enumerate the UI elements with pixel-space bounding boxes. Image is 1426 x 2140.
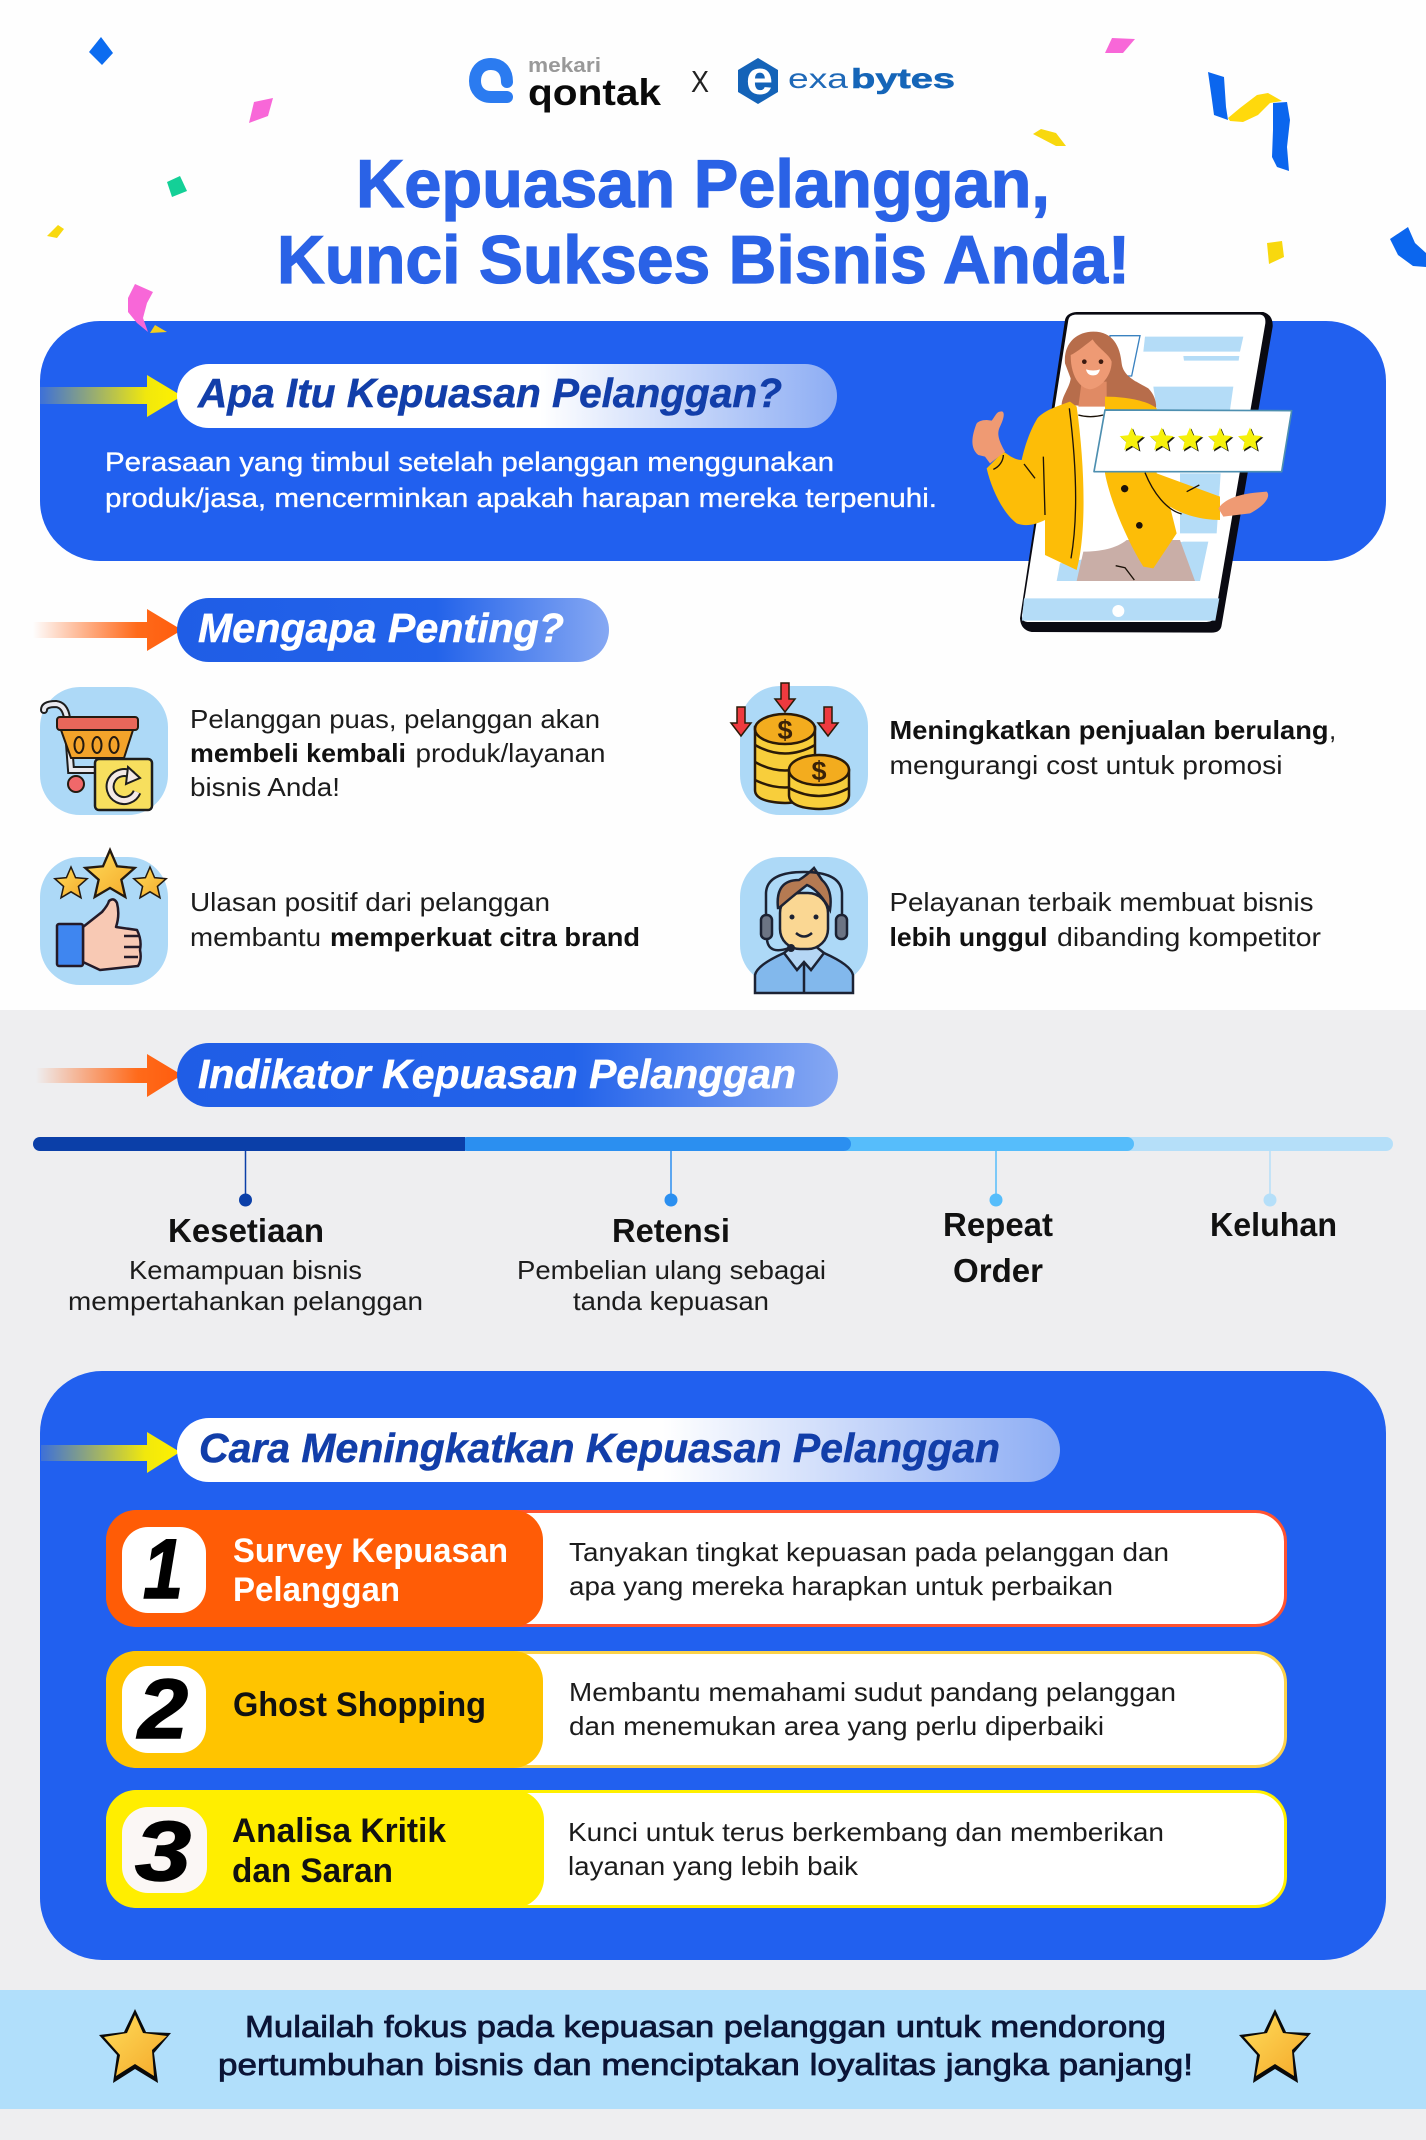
heading pill: indikator: Indikator Kepuasan Pelanggan xyxy=(198,1051,796,1097)
text block: membeli kembali xyxy=(190,738,406,768)
heading pill: mengapa penting xyxy=(177,598,609,662)
step 2 xyxy=(106,1651,1286,1768)
text block: Ulasan positif dari pelanggan xyxy=(190,887,550,917)
panel: benefit sales xyxy=(731,683,1336,815)
indicator: kesetiaan: Kesetiaan xyxy=(168,1212,324,1249)
text block: lebih unggul xyxy=(890,922,1048,952)
bytes wordmark: bytes xyxy=(851,63,955,94)
step 2: 2 xyxy=(136,1662,188,1756)
confetti decoration xyxy=(47,37,1426,267)
heading pill: Apa Itu Kepuasan Pelanggan? xyxy=(197,370,782,416)
text block xyxy=(890,715,1336,780)
rating card xyxy=(1094,410,1292,472)
icon: shopping cart xyxy=(40,687,168,815)
text block: membantu xyxy=(190,922,321,952)
mekari wordmark: mekari xyxy=(528,55,601,77)
icon: stars and thumbs up xyxy=(40,850,168,985)
indicator: kesetiaan xyxy=(68,1151,423,1316)
icon: left star xyxy=(99,2009,171,2083)
step 3: dan Saran xyxy=(232,1852,393,1890)
text block: mengurangi cost untuk promosi xyxy=(890,750,1282,780)
step 1: Survey Kepuasan xyxy=(233,1532,508,1570)
panel: cara meningkatkan kepuasan xyxy=(40,1371,1386,1960)
step 3: Analisa Kritik xyxy=(232,1812,446,1850)
arrow: orange indikator xyxy=(36,1054,182,1097)
step 1 xyxy=(106,1510,1286,1627)
woman xyxy=(972,332,1268,581)
definition text: produk/jasa, mencerminkan apakah harapan mereka terpenuhi. xyxy=(105,483,937,513)
text block xyxy=(190,704,606,802)
indicator: retensi: Retensi xyxy=(612,1212,730,1249)
icon: right star xyxy=(1239,2009,1311,2083)
icon: exabytes hexagon xyxy=(738,58,778,104)
step 3 xyxy=(106,1790,1286,1908)
text block: Meningkatkan penjualan berulang xyxy=(890,715,1328,745)
background: gray lower area xyxy=(0,1010,1426,2140)
step 2: Ghost Shopping xyxy=(233,1686,486,1724)
closing text xyxy=(218,2009,1193,2082)
icon: coins with arrows xyxy=(731,683,868,815)
indicator: keluhan: Keluhan xyxy=(1210,1206,1337,1243)
panel: benefit brand xyxy=(40,850,640,985)
step 1: 1 xyxy=(143,1522,183,1616)
indicator: kesetiaan: Kemampuan bisnis xyxy=(129,1255,362,1285)
heading pill xyxy=(177,1418,1060,1482)
indicator: keluhan xyxy=(1210,1151,1337,1243)
illustration: woman in phone with rating card xyxy=(972,312,1292,633)
closing text: pertumbuhan bisnis dan menciptakan loyalitas jangka panjang! xyxy=(218,2047,1193,2082)
phone xyxy=(1020,312,1273,633)
icon: coins with arrows: $ xyxy=(811,756,827,786)
indicator: repeat order xyxy=(943,1151,1053,1289)
indicator: retensi: Pembelian ulang sebagai xyxy=(517,1255,826,1285)
icon: customer service agent xyxy=(740,857,868,993)
step 1: Pelanggan xyxy=(233,1571,400,1609)
exa wordmark: exa xyxy=(788,63,849,94)
X separator: X xyxy=(691,64,709,99)
indicator: retensi xyxy=(517,1151,826,1316)
indicator: retensi: tanda kepuasan xyxy=(573,1286,769,1316)
heading pill: indikator xyxy=(177,1043,838,1107)
callout: closing banner xyxy=(0,1990,1426,2109)
arrow: orange mengapa penting xyxy=(33,609,182,651)
text block: produk/layanan xyxy=(416,738,606,768)
text block xyxy=(190,887,640,952)
text block xyxy=(890,887,1321,952)
text block: Pelanggan puas, pelanggan akan xyxy=(190,704,600,734)
logos header xyxy=(475,51,955,113)
heading pill: Cara Meningkatkan Kepuasan Pelanggan xyxy=(199,1425,1000,1471)
confetti: pink ribbon over panel xyxy=(128,284,167,333)
text block: memperkuat citra brand xyxy=(330,922,640,952)
indicator: repeat order: Order xyxy=(953,1252,1043,1289)
step 2: dan menemukan area yang perlu diperbaiki xyxy=(569,1711,1104,1741)
arrow: yellow xyxy=(41,1432,180,1473)
heading pill xyxy=(177,364,837,428)
indicator: kesetiaan: mempertahankan pelanggan xyxy=(68,1286,423,1316)
step 3: layanan yang lebih baik xyxy=(568,1851,859,1881)
text block: bisnis Anda! xyxy=(190,772,340,802)
definition text xyxy=(105,447,937,513)
panel: benefit competitive xyxy=(740,857,1321,993)
step 1: Tanyakan tingkat kepuasan pada pelanggan dan xyxy=(569,1537,1169,1567)
qontak wordmark: qontak xyxy=(528,72,661,113)
closing text: Mulailah fokus pada kepuasan pelanggan untuk mendorong xyxy=(245,2009,1166,2044)
title: Kepuasan Pelanggan, xyxy=(356,146,1050,222)
heading pill: mengapa penting: Mengapa Penting? xyxy=(198,605,564,651)
text block: , xyxy=(1329,715,1336,745)
arrow: yellow xyxy=(40,375,182,417)
step 3: Kunci untuk terus berkembang dan memberikan xyxy=(568,1817,1164,1847)
exabytes e glyph: e xyxy=(746,51,773,104)
background: white upper area xyxy=(0,0,1426,1010)
icon: qontak logo xyxy=(475,64,507,97)
panel: benefit repurchase xyxy=(40,687,606,815)
text block: dibanding kompetitor xyxy=(1057,922,1321,952)
panel: apa itu kepuasan pelanggan xyxy=(40,321,1386,561)
indicator: repeat order: Repeat xyxy=(943,1206,1053,1243)
icon: coins with arrows: $ xyxy=(777,715,793,745)
timeline bar xyxy=(33,1137,1393,1151)
step 1: apa yang mereka harapkan untuk perbaikan xyxy=(569,1571,1113,1601)
step 2: Membantu memahami sudut pandang pelanggan xyxy=(569,1677,1176,1707)
title xyxy=(277,146,1130,298)
definition text: Perasaan yang timbul setelah pelanggan menggunakan xyxy=(105,447,834,477)
step 3: 3 xyxy=(135,1804,191,1898)
title: Kunci Sukses Bisnis Anda! xyxy=(277,222,1130,298)
text block: Pelayanan terbaik membuat bisnis xyxy=(890,887,1314,917)
